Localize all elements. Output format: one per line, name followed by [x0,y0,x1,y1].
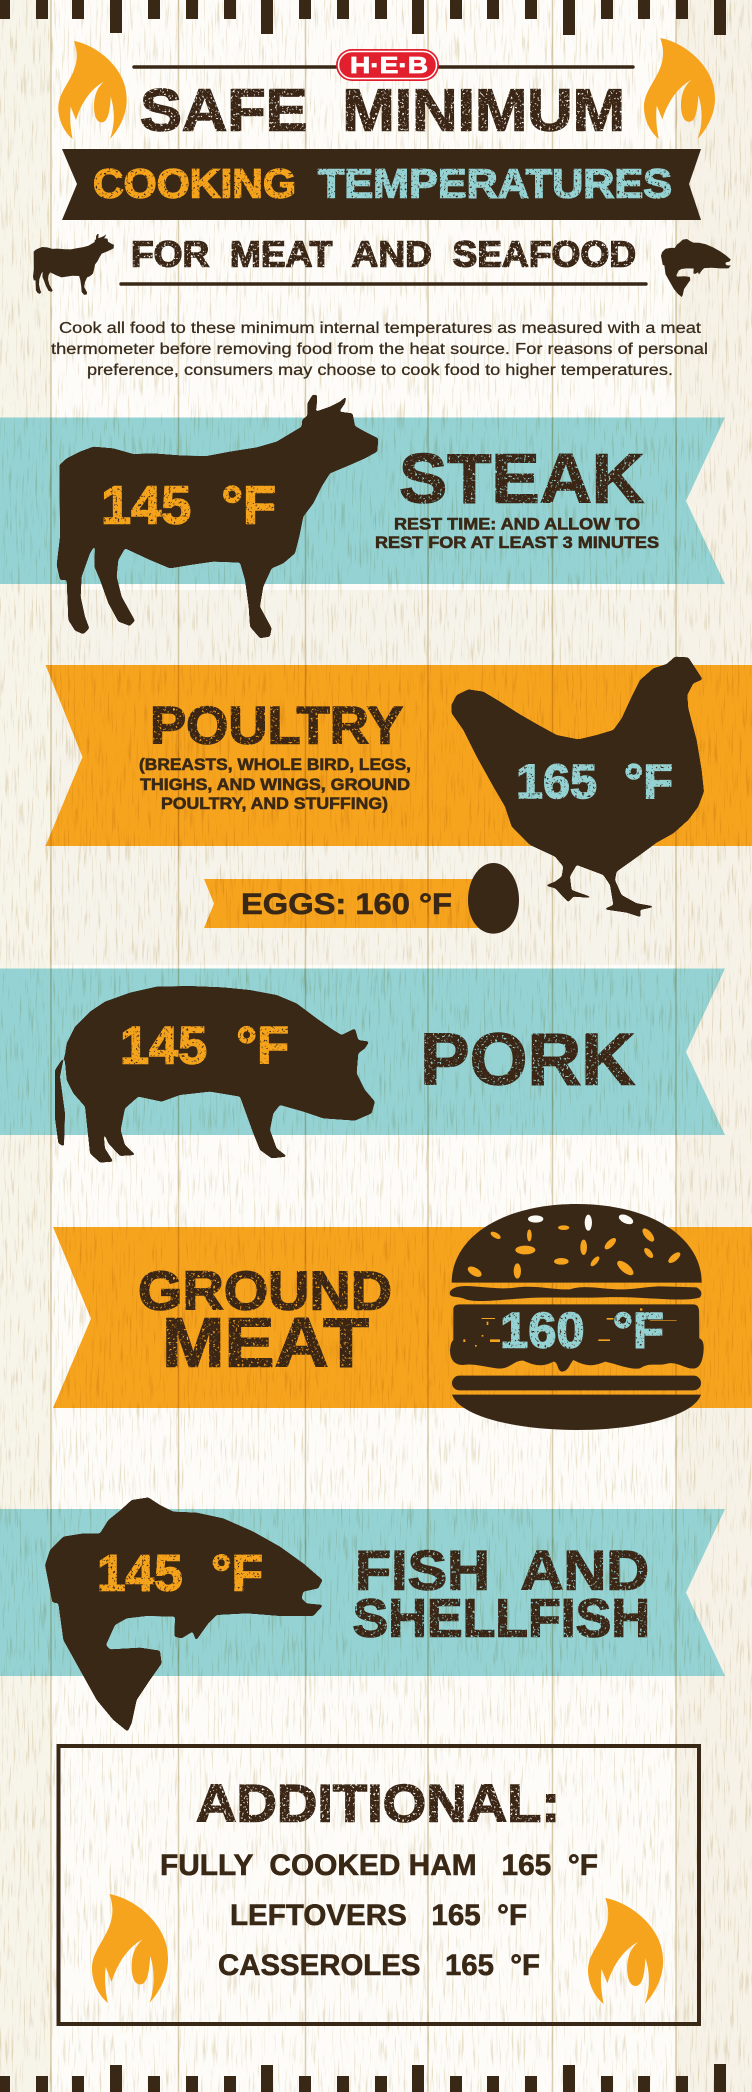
section: ground meat [138,1204,704,1430]
panel: additional [58,1746,699,2024]
heading: cooking: COOKING [93,160,296,206]
icon: flame bottom left [92,1894,168,2003]
icon: small fish [661,239,731,297]
heading: steak: STEAK [399,440,644,518]
icon: pig silhouette [55,986,375,1163]
note: poultry parts [139,755,411,813]
heading: poultry: POULTRY [150,696,403,756]
section: poultry [139,657,704,934]
heading: additional: ADDITIONAL: [196,1774,560,1834]
heading: fish and: FISH AND [355,1538,649,1602]
section: pork [55,986,635,1163]
top tick border [0,0,726,35]
section: steak [57,395,659,638]
icon: flame right [644,38,715,139]
subtitle rule [121,282,646,286]
icon: burger [450,1204,704,1430]
banner: fish [0,1509,725,1676]
temperature: fish: 145 °F [97,1544,263,1602]
note: rest time [375,514,659,552]
bottom tick border [0,2064,726,2092]
title: safe minimum: SAFE MINIMUM [140,76,625,144]
intro paragraph: thermometer before removing food from the heat source. For reasons of personal [51,341,708,358]
logo: H-E-B [336,49,439,81]
banner: poultry [46,665,752,846]
temperature: steak: 145 °F [101,476,276,536]
icon: flame bottom right [588,1898,663,2004]
heading: temperatures: TEMPERATURES [318,160,672,206]
banner: eggs [204,879,490,928]
header [33,38,731,379]
note: poultry parts: POULTRY, AND STUFFING) [161,794,388,813]
intro paragraph [51,320,708,379]
icon: small cow [33,234,114,295]
heading: meat: MEAT [162,1304,369,1382]
icon: fish silhouette [45,1497,323,1732]
heading: shellfish: SHELLFISH [352,1590,650,1648]
icon: flame left [58,41,127,139]
intro paragraph: Cook all food to these minimum internal temperatures as measured with a meat [59,320,702,337]
banner: steak [0,418,725,584]
temperature: pork: 145 °F [120,1016,289,1076]
heading: ground: GROUND [138,1260,392,1322]
banner: cooking temperatures [62,149,701,220]
temperature: poultry: 165 °F [516,756,673,809]
item: leftovers: LEFTOVERS 165 °F [230,1899,527,1932]
icon: cow silhouette [57,395,378,638]
heading: for meat and seafood: FOR MEAT AND SEAFOOD [131,234,636,274]
title rule with logo gap [134,65,633,69]
banner: ground meat [53,1227,752,1408]
note: rest time: REST FOR AT LEAST 3 MINUTES [375,533,659,552]
heading: pork: PORK [420,1020,635,1100]
label: eggs: EGGS: 160 °F [241,888,452,921]
note: poultry parts: (BREASTS, WHOLE BIRD, LEGS, [139,755,411,774]
item: casseroles: CASSEROLES 165 °F [218,1949,540,1982]
note: poultry parts: THIGHS, AND WINGS, GROUND [140,775,410,794]
icon: hen silhouette [451,657,704,917]
section: fish [45,1497,650,1732]
banner: pork [0,968,725,1135]
item: fully cooked ham: FULLY COOKED HAM 165 °F [160,1849,598,1882]
note: rest time: REST TIME: AND ALLOW TO [394,514,640,534]
temperature: ground meat: 160 °F [500,1302,664,1358]
intro paragraph: preference, consumers may choose to cook food to higher temperatures. [87,362,673,379]
logo: H-E-B: H·E·B [350,52,428,78]
icon: egg [468,863,519,934]
